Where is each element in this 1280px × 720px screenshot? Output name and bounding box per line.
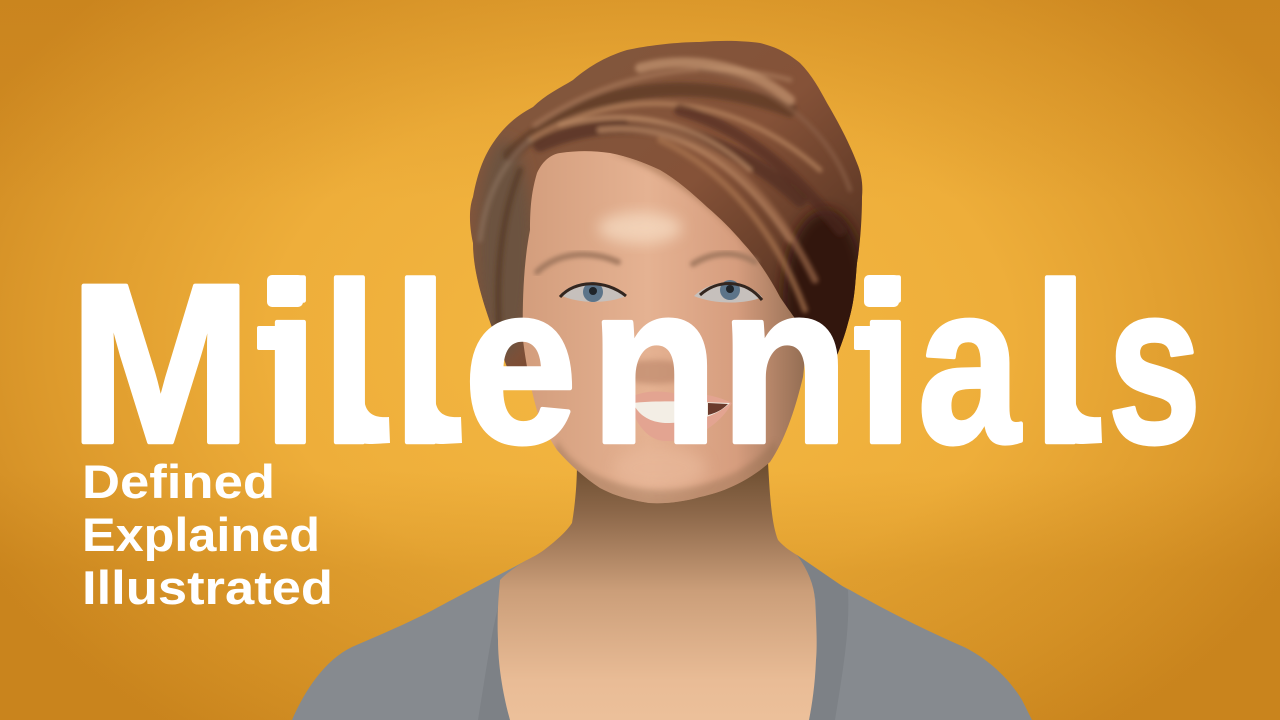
title: Millennials: s	[1108, 238, 1201, 491]
face	[522, 151, 804, 504]
subtitle: Explained: Explained	[82, 508, 320, 561]
title: Millennials: i	[858, 238, 913, 491]
title: Millennials: l	[393, 238, 448, 491]
title: Millennials: n	[590, 238, 718, 491]
hair	[470, 40, 862, 366]
eyebrows	[537, 254, 755, 272]
title: Millennials: l	[1033, 238, 1088, 491]
eyes	[560, 280, 762, 303]
title: Millennials: n	[720, 238, 849, 491]
title: Millennials: e	[464, 238, 577, 491]
title: Millennials: l	[322, 238, 377, 491]
grey t-shirt	[292, 555, 1032, 720]
forehead highlight	[598, 212, 682, 244]
title: Millennials: i	[263, 238, 318, 491]
subtitle: Defined: Defined	[82, 455, 275, 508]
subtitle: Illustrated: Illustrated	[82, 561, 333, 614]
portrait of smiling woman	[292, 30, 1032, 720]
subtitle list	[82, 455, 333, 614]
chin highlight	[630, 456, 702, 484]
mouth	[628, 392, 732, 441]
fringe shadow	[616, 155, 749, 250]
nose shadow	[636, 358, 674, 386]
title: Millennials: a	[918, 238, 1021, 491]
title: Millennials	[69, 238, 1201, 491]
hair strands	[480, 63, 850, 340]
letter details: i serifs, i dots, l feet	[257, 275, 1102, 444]
jaw shadow	[554, 442, 777, 503]
neck and chest	[498, 462, 817, 720]
title: Millennials: M	[69, 238, 252, 491]
